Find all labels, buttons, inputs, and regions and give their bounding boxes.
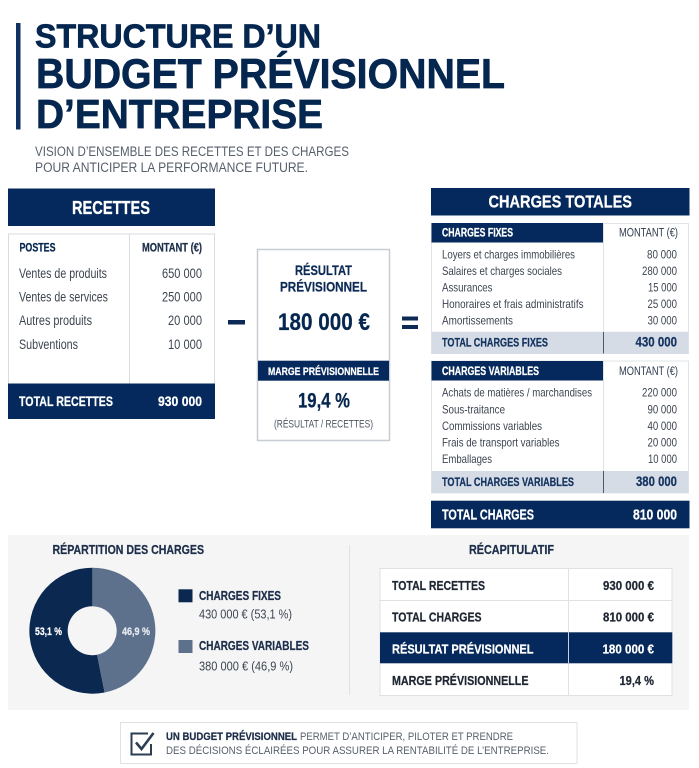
charges fixes table: Assurances xyxy=(442,280,492,294)
recettes header xyxy=(8,188,215,226)
charges variables table: Commissions variables xyxy=(442,419,542,433)
legend: CHARGES FIXES xyxy=(199,588,281,603)
charges fixes table: 15 000 xyxy=(648,280,677,294)
summary table: RÉSULTAT PRÉVISIONNEL xyxy=(392,641,534,656)
charges variables table: 220 000 xyxy=(642,386,677,400)
total charges: TOTAL CHARGES xyxy=(442,508,534,524)
charges fixes table: CHARGES FIXES xyxy=(442,228,513,240)
charges totales header xyxy=(431,188,690,216)
minus sign xyxy=(228,320,245,324)
charges fixes table: Loyers et charges immobilières xyxy=(442,247,575,261)
charges variables table: 380 000 xyxy=(636,474,677,489)
callout: footer note xyxy=(120,722,577,764)
charges fixes table: Honoraires et frais administratifs xyxy=(442,297,584,311)
panel: recettes xyxy=(8,188,215,419)
callout: footer note: UN BUDGET PRÉVISIONNEL xyxy=(166,730,297,743)
marge strip xyxy=(258,361,389,381)
charges fixes table: 30 000 xyxy=(648,314,677,328)
charges fixes table: Amortissements xyxy=(442,314,513,328)
charges fixes table: 430 000 xyxy=(636,335,677,350)
panel: résultat prévisionnel: 19,4 % xyxy=(298,390,350,412)
panel: résultat prévisionnel: (RÉSULTAT / RECETTES) xyxy=(274,418,373,430)
heading: répartition des charges: RÉPARTITION DES CHARGES xyxy=(52,542,204,557)
panel: résultat prévisionnel: 180 000 € xyxy=(278,309,370,336)
legend: CHARGES VARIABLES xyxy=(199,638,309,653)
recettes table: Ventes de produits xyxy=(19,266,107,281)
recettes header: RECETTES xyxy=(72,197,150,218)
recettes table: MONTANT (€) xyxy=(142,242,202,254)
summary table: 180 000 € xyxy=(602,641,654,656)
panel: résultat prévisionnel xyxy=(258,250,390,440)
recettes table: Autres produits xyxy=(19,313,92,328)
charges totales header: CHARGES TOTALES xyxy=(488,192,632,212)
charges fixes table xyxy=(432,223,688,354)
charges fixes table: 280 000 xyxy=(642,264,677,278)
callout: footer note: PERMET D’ANTICIPER, PILOTER ET PRENDRE xyxy=(300,731,513,743)
charges fixes table: Salaires et charges sociales xyxy=(442,264,562,278)
title block xyxy=(16,18,505,137)
charges fixes table: MONTANT (€) xyxy=(619,228,678,240)
title block: BUDGET PRÉVISIONNEL xyxy=(36,50,505,97)
charges variables table: Sous-traitance xyxy=(442,402,505,416)
panel: bottom summary xyxy=(8,535,689,710)
total recettes xyxy=(8,384,215,419)
recettes table: 20 000 xyxy=(168,313,202,328)
subtitle xyxy=(35,144,349,175)
recettes table: POSTES xyxy=(20,242,56,254)
subtitle: POUR ANTICIPER LA PERFORMANCE FUTURE. xyxy=(35,160,308,175)
summary table: TOTAL CHARGES xyxy=(392,610,482,625)
charges variables table: 40 000 xyxy=(648,419,677,433)
equals sign xyxy=(402,316,418,329)
subtitle: VISION D’ENSEMBLE DES RECETTES ET DES CHARGES xyxy=(35,144,349,159)
charges variables table xyxy=(432,361,688,493)
recettes table: Subventions xyxy=(19,337,78,352)
charges variables table: TOTAL CHARGES VARIABLES xyxy=(442,477,574,489)
callout: footer note: DES DÉCISIONS ÉCLAIRÉES POUR ASSURER LA RENTABILITÉ DE L’ENTREPRISE. xyxy=(166,744,549,757)
charges variables table: Achats de matières / marchandises xyxy=(442,386,592,400)
recettes table: Ventes de services xyxy=(19,290,108,304)
title block: D’ENTREPRISE xyxy=(36,91,323,137)
total charges xyxy=(431,501,690,528)
title block: STRUCTURE D’UN xyxy=(35,18,321,54)
summary table: MARGE PRÉVISIONNELLE xyxy=(392,673,529,688)
summary table xyxy=(380,568,672,696)
legend: 430 000 € (53,1 %) xyxy=(199,606,292,621)
recettes table: 650 000 xyxy=(162,266,202,281)
charges fixes table: 80 000 xyxy=(647,247,677,261)
donut chart: 53,1 % xyxy=(35,626,62,638)
total charges: 810 000 xyxy=(633,508,677,524)
panel: charges totales xyxy=(431,188,690,528)
panel: résultat prévisionnel: PRÉVISIONNEL xyxy=(280,280,367,294)
heading: récapitulatif: RÉCAPITULATIF xyxy=(469,542,554,557)
legend xyxy=(178,588,309,674)
icon: checkbox xyxy=(132,733,154,754)
total recettes: TOTAL RECETTES xyxy=(19,393,113,409)
charges variables table: 20 000 xyxy=(648,436,677,450)
recettes table xyxy=(8,234,214,384)
summary table: 810 000 € xyxy=(603,610,654,625)
donut chart: 46,9 % xyxy=(122,626,150,638)
recettes table: 10 000 xyxy=(168,337,202,352)
charges variables table: 90 000 xyxy=(648,402,677,416)
summary table: TOTAL RECETTES xyxy=(392,578,485,593)
summary table: 19,4 % xyxy=(620,673,654,688)
legend: 380 000 € (46,9 %) xyxy=(199,659,293,674)
panel: résultat prévisionnel: RÉSULTAT xyxy=(295,263,353,278)
charges variables table: Frais de transport variables xyxy=(442,436,560,450)
charges variables table: MONTANT (€) xyxy=(619,366,678,378)
summary table: 930 000 € xyxy=(603,578,654,593)
total recettes: 930 000 xyxy=(158,393,202,409)
charges variables table: CHARGES VARIABLES xyxy=(442,366,539,378)
charges variables table: Emballages xyxy=(442,452,492,466)
charges variables table: 10 000 xyxy=(648,452,677,466)
charges fixes table: 25 000 xyxy=(648,297,677,311)
charges fixes table: TOTAL CHARGES FIXES xyxy=(442,338,548,350)
recettes table: 250 000 xyxy=(162,290,202,304)
marge strip: MARGE PRÉVISIONNELLE xyxy=(268,365,379,378)
donut chart xyxy=(29,568,155,694)
